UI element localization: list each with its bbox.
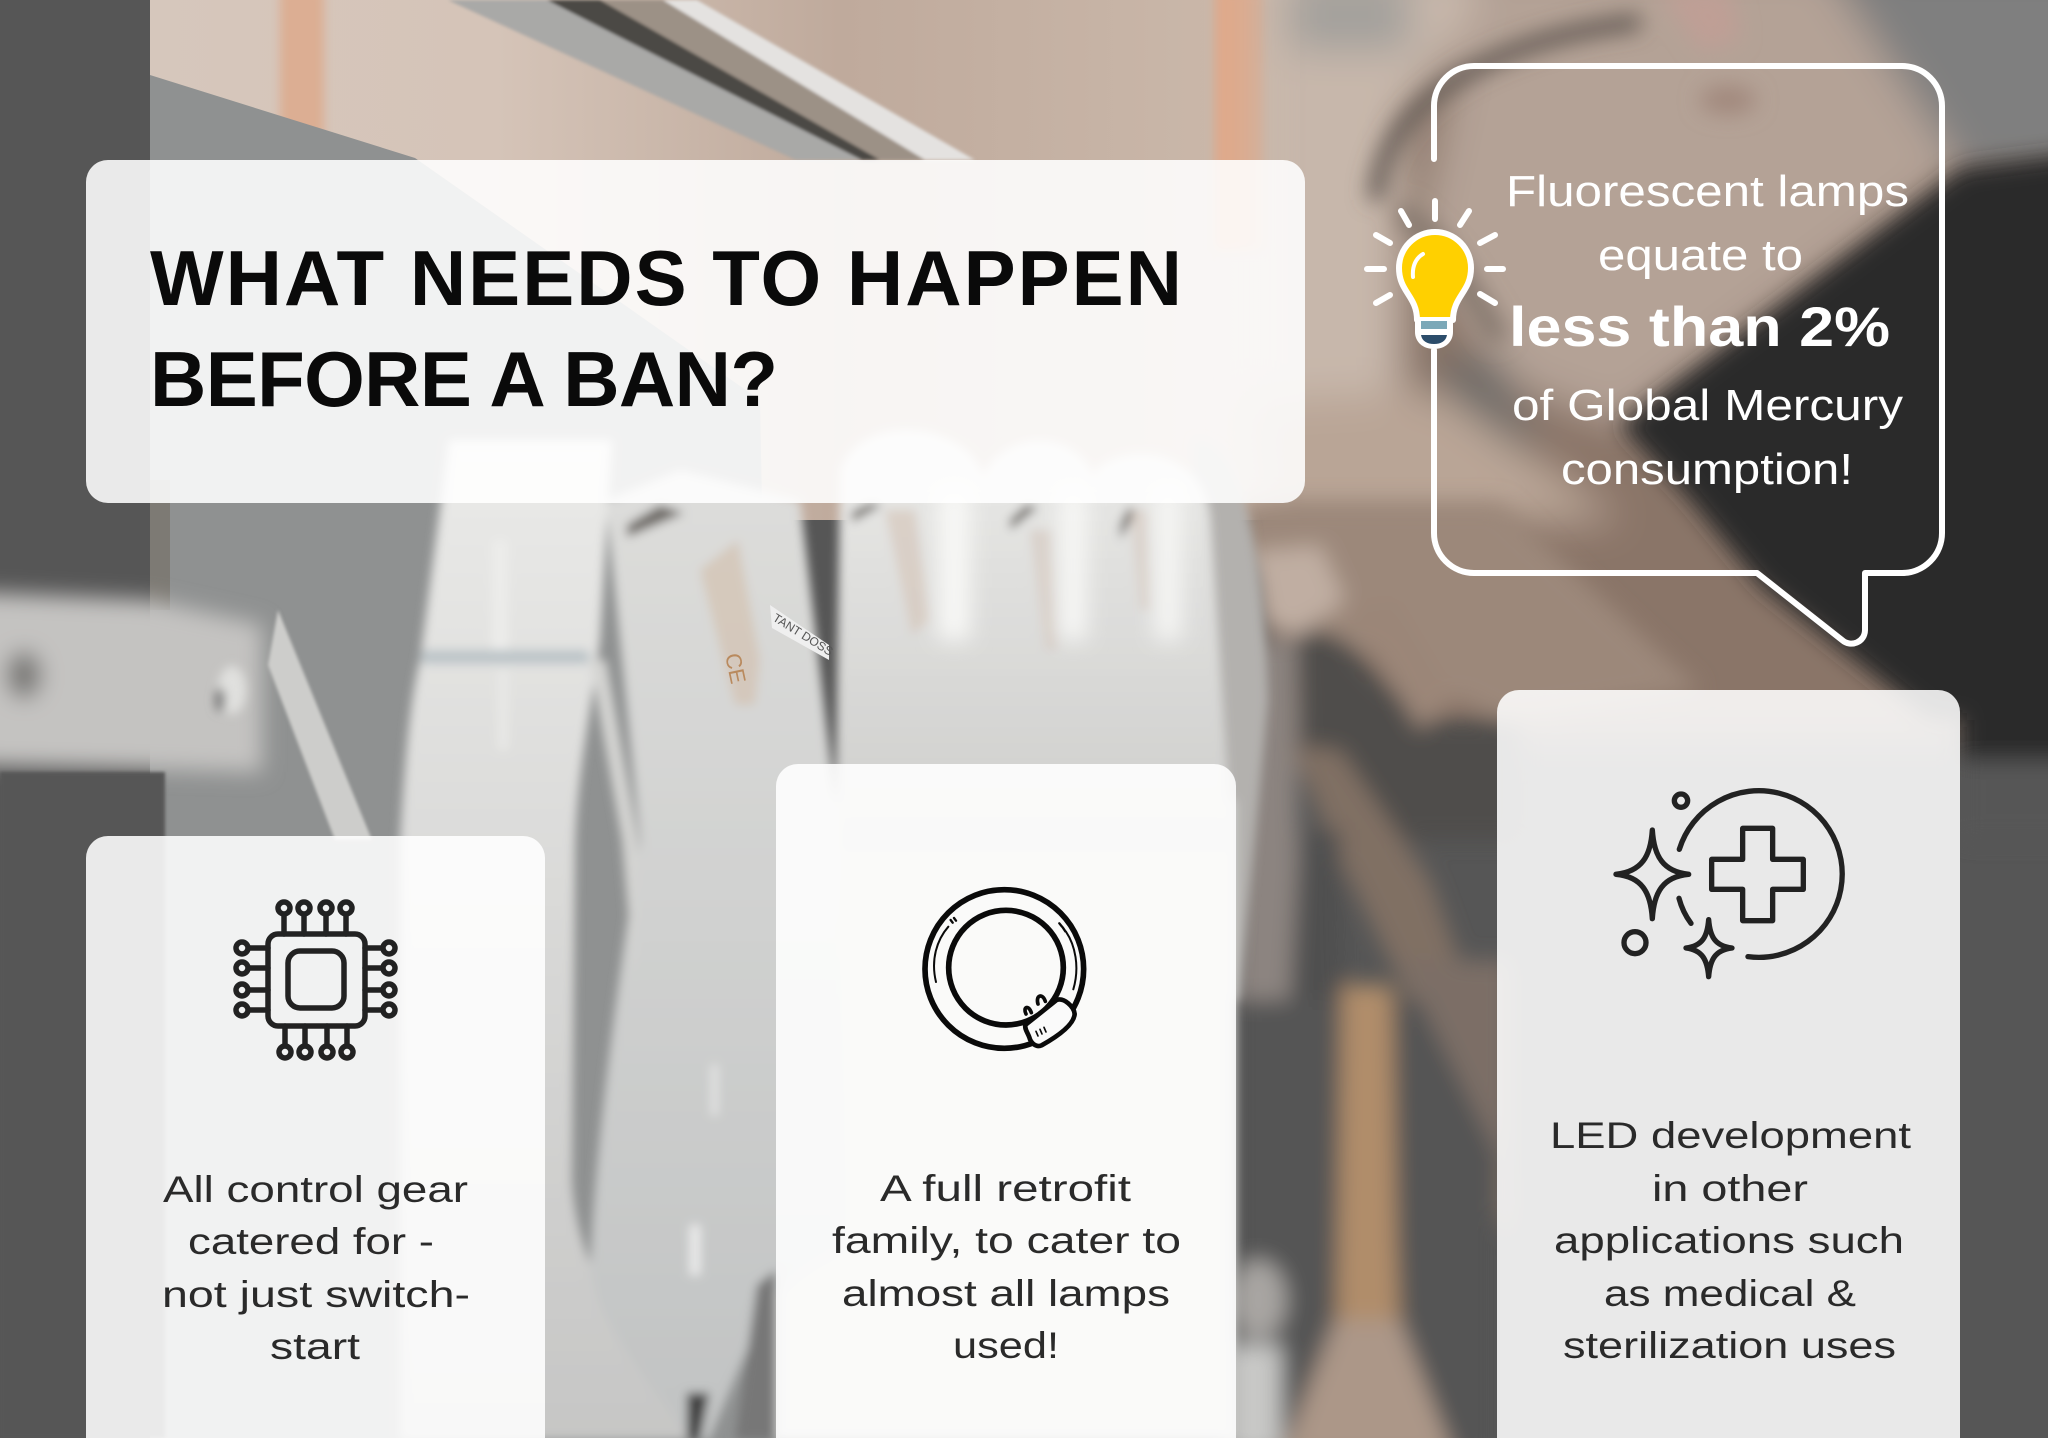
card text: LED development [1550,1115,1912,1156]
panel: LED development [1497,690,1960,1438]
title text: WHAT NEEDS TO HAPPEN [150,234,1182,322]
card text: All control gear [163,1169,468,1210]
card text: catered for - [188,1221,434,1262]
tube 1 under card and lower ring [400,440,700,1438]
card text: applications such [1554,1220,1904,1261]
card text: as medical & [1604,1273,1856,1314]
card text [832,1168,1181,1366]
dark lower torso [1226,503,1700,1438]
gray machine wall [150,75,780,1438]
lamp label [720,605,835,686]
tube 5 [985,440,1110,850]
peach back wall [150,0,1300,520]
panel: control gear [86,836,545,1438]
gap at ring bottom [687,1393,709,1438]
icon: circular fluorescent lamp [925,890,1084,1048]
metal rod [448,0,975,160]
panel: retrofit family [776,764,1236,1438]
title text: BEFORE A BAN? [150,335,778,423]
tube 2 [590,470,840,1438]
callout text: of Global Mercury [1512,381,1903,430]
tubes group [400,430,1268,1438]
card text: family, to cater to [832,1220,1181,1261]
icon: medical cross and sparkles [1616,791,1842,977]
card text [162,1169,470,1367]
callout text: less than 2% [1509,295,1890,358]
tube 6 [1095,454,1232,850]
speech bubble outline [1434,66,1942,644]
printed marks on lamps [700,540,760,705]
callout text: consumption! [1561,445,1853,494]
card text: A full retrofit [880,1168,1132,1209]
seam tops [627,505,684,537]
callout: mercury statistic speech bubble [1367,66,1942,644]
callout text: Fluorescent lamps [1506,167,1909,216]
lamp label: CE [720,651,751,686]
card text: sterilization uses [1563,1325,1896,1366]
card text: used! [953,1325,1059,1366]
card text: almost all lamps [842,1273,1170,1314]
lamp gloss [712,1065,717,1115]
card text: start [270,1326,361,1367]
card text: in other [1652,1168,1808,1209]
title text [150,234,1182,423]
under-card lamps block [776,800,1236,1438]
tube far right fade [1170,440,1268,1000]
icon: circuit chip [236,902,395,1058]
icon: light bulb [1367,201,1503,349]
callout text: equate to [1598,231,1803,280]
metal bracket [0,592,262,772]
panel: title [86,160,1305,503]
person: arm and face [1250,0,2048,740]
card text: not just switch- [162,1274,470,1315]
lamp highlights [938,490,1181,640]
tube 4 [835,430,990,850]
lamp label: TANT DOSS [770,611,835,659]
card text [1550,1115,1912,1366]
callout text [1506,167,1909,494]
thin white slat between tubes [590,660,638,980]
white strip [268,610,372,840]
